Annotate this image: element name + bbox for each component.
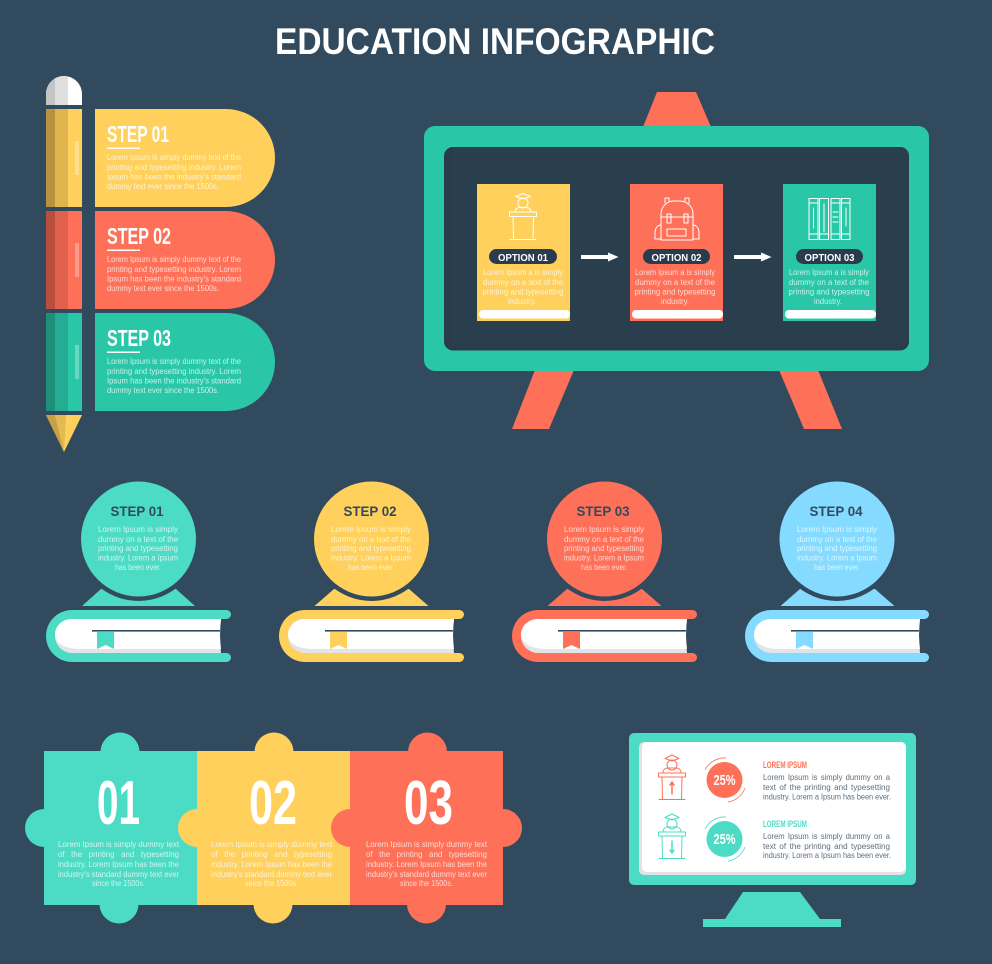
text block 1: Lorem Ipsum is simply dummy on a — [763, 773, 891, 782]
option card 01 — [477, 184, 570, 321]
arrow 1 — [581, 252, 618, 262]
text block 1: LOREM IPSUM — [763, 760, 807, 771]
panel: book step 02: industry. Lorem a Ipsum — [331, 554, 411, 562]
option card 01: printing and typesetting — [482, 288, 564, 296]
option card 03: printing and typesetting — [788, 288, 870, 296]
step band 01: STEP 01 — [107, 121, 169, 147]
panel: book step 01: STEP 01 — [110, 503, 164, 519]
option card 02 — [630, 184, 723, 321]
text block 2: industry. Lorem a Ipsum has been ever. — [763, 851, 891, 860]
puzzle piece 02: industry. Lorem Ipsum has been the — [211, 860, 333, 869]
panel: book step 02 — [279, 477, 464, 662]
puzzle piece 02: of the printing and typesetting — [211, 850, 332, 859]
chart: 25 percent red — [705, 758, 745, 802]
panel: book step 01: dummy on a text of the — [98, 535, 179, 544]
step band 01: printing and typesetting industry. Lorem — [107, 163, 241, 172]
option card 02: dummy on a text of the — [635, 278, 716, 287]
step band 02: dummy text ever since the 1500s. — [107, 284, 219, 293]
panel: book step 02: STEP 02 — [344, 503, 397, 519]
icon: pencil — [46, 76, 82, 452]
panel: chalkboard — [424, 92, 929, 429]
step band 01: dummy text ever since the 1500s. — [107, 182, 219, 191]
puzzle piece 01: industry's standard dummy text ever — [58, 870, 179, 879]
panel: book step 01: printing and typesetting — [98, 544, 178, 553]
step band 01: Lorem Ipsum is simply dummy text of the — [107, 153, 241, 162]
option label: OPTION 03 — [804, 253, 855, 264]
easel legs — [512, 92, 842, 429]
panel: book step 04: dummy on a text of the — [797, 535, 878, 544]
icon: books — [809, 198, 850, 240]
monitor frame — [629, 733, 916, 885]
panel: book step 03 — [512, 477, 697, 662]
puzzle piece 01 — [25, 732, 197, 924]
puzzle piece 03: since the 1500s. — [400, 879, 453, 888]
panel: book step 03: Lorem Ipsum is simply — [564, 525, 644, 534]
puzzle piece 01: Lorem Ipsum is simply dummy text — [58, 840, 180, 849]
puzzle piece 03: industry. Lorem Ipsum has been the — [366, 860, 488, 869]
option card 03 — [783, 184, 876, 321]
option label: OPTION 01 — [498, 253, 548, 264]
chart: 25 percent red: 25% — [714, 772, 736, 789]
step band 03: Ipsum has been the industry's standard — [107, 376, 241, 386]
panel: book step 03: dummy on a text of the — [564, 535, 645, 544]
icon: book — [512, 610, 697, 662]
option label: OPTION 02 — [652, 253, 702, 264]
panel: book step 04: STEP 04 — [810, 503, 863, 519]
puzzle piece 02: since the 1500s. — [245, 879, 298, 888]
option card 02: industry. — [661, 297, 689, 306]
puzzle piece 02: industry's standard dummy text ever — [211, 870, 332, 879]
chart: 25 percent teal: 25% — [714, 831, 736, 848]
icon: podium — [510, 194, 536, 240]
board frame — [424, 126, 929, 371]
puzzle piece 03 — [331, 732, 522, 924]
option card 01: industry. — [508, 297, 536, 306]
panel: book step 01: Lorem Ipsum is simply — [98, 525, 178, 534]
text block 2: Lorem Ipsum is simply dummy on a — [763, 832, 891, 841]
board surface — [444, 147, 909, 350]
step band 01 — [95, 109, 275, 207]
option card 02: Lorem Ipsum a is simply — [635, 268, 715, 277]
step band 03: Lorem Ipsum is simply dummy text of the — [107, 357, 241, 366]
arrow 2 — [734, 252, 772, 262]
step band 03: dummy text ever since the 1500s. — [107, 386, 219, 395]
text block 1 — [763, 760, 891, 802]
chart: 25 percent teal — [705, 817, 745, 861]
text block 1: industry. Lorem a Ipsum has been ever. — [763, 792, 891, 802]
text block 1: text of the printing and typesetting — [763, 783, 890, 792]
puzzle piece 03: 03 — [404, 769, 453, 838]
panel: book step 03: STEP 03 — [576, 503, 630, 519]
puzzle piece 03: industry's standard dummy text ever — [366, 870, 487, 879]
monitor stand — [703, 892, 841, 927]
puzzle piece 03: Lorem Ipsum is simply dummy text — [366, 840, 488, 849]
puzzle piece 03: of the printing and typesetting — [366, 850, 487, 859]
panel: book step 04 — [745, 477, 929, 662]
puzzle piece 02 — [178, 732, 350, 924]
panel: book step 03: industry. Lorem a Ipsum — [564, 554, 644, 562]
puzzle piece 01: since the 1500s. — [92, 879, 145, 888]
icon: backpack — [655, 198, 699, 240]
step band 02: Lorem Ipsum is simply dummy text of the — [107, 255, 241, 264]
panel: puzzle — [25, 732, 522, 924]
panel: book step 01 — [46, 477, 231, 662]
icon: book — [279, 610, 464, 662]
panel: book step 04: industry. Lorem a Ipsum — [797, 554, 877, 562]
panel: monitor — [629, 733, 916, 927]
panel: book step 04: printing and typesetting — [797, 544, 877, 553]
text block 2: text of the printing and typesetting — [763, 842, 890, 851]
option card 01: Lorem Ipsum a is simply — [483, 268, 563, 277]
icon: book — [46, 610, 231, 662]
title: EDUCATION INFOGRAPHIC — [275, 21, 715, 62]
puzzle piece 01: industry. Lorem Ipsum has been the — [58, 860, 180, 869]
panel: book step 04: Lorem Ipsum is simply — [797, 525, 877, 534]
panel: pencil steps — [46, 76, 275, 452]
step band 01: Ipsum has been the industry's standard — [107, 172, 241, 182]
option card 03: Lorem Ipsum a is simply — [789, 268, 869, 277]
monitor screen — [639, 742, 906, 875]
step band 03 — [95, 313, 275, 411]
panel: book step 01: industry. Lorem a Ipsum — [98, 554, 178, 562]
panel: book step 02: Lorem Ipsum is simply — [331, 525, 411, 534]
step band 03: printing and typesetting industry. Lorem — [107, 367, 241, 376]
panel: book step 02: dummy on a text of the — [331, 535, 412, 544]
option card 02: printing and typesetting — [634, 288, 716, 296]
step band 02: printing and typesetting industry. Lorem — [107, 265, 241, 274]
option card 03: industry. — [814, 297, 842, 306]
puzzle piece 02: Lorem Ipsum is simply dummy text — [211, 840, 333, 849]
step band 02: STEP 02 — [107, 223, 171, 249]
text block 2: LOREM IPSUM — [763, 819, 807, 830]
panel: book step 02: printing and typesetting — [331, 544, 411, 553]
text block 2 — [763, 819, 891, 860]
panel: book step 01: has been ever. — [115, 563, 161, 572]
puzzle piece 01: of the printing and typesetting — [58, 850, 179, 859]
puzzle piece 01: 01 — [97, 769, 140, 838]
icon: podium down — [658, 814, 686, 858]
panel: book step 03: has been ever. — [581, 563, 627, 572]
icon: podium up — [658, 755, 686, 800]
step band 02: Ipsum has been the industry's standard — [107, 274, 241, 284]
step band 02 — [95, 211, 275, 309]
step band 03: STEP 03 — [107, 325, 171, 351]
panel: book step 03: printing and typesetting — [564, 544, 644, 553]
icon: book — [745, 610, 929, 662]
panel: book step 04: has been ever. — [814, 563, 860, 572]
panel: book step 02: has been ever. — [348, 563, 394, 572]
option card 01: dummy on a text of the — [483, 278, 564, 287]
option card 03: dummy on a text of the — [789, 278, 870, 287]
puzzle piece 02: 02 — [249, 769, 297, 838]
